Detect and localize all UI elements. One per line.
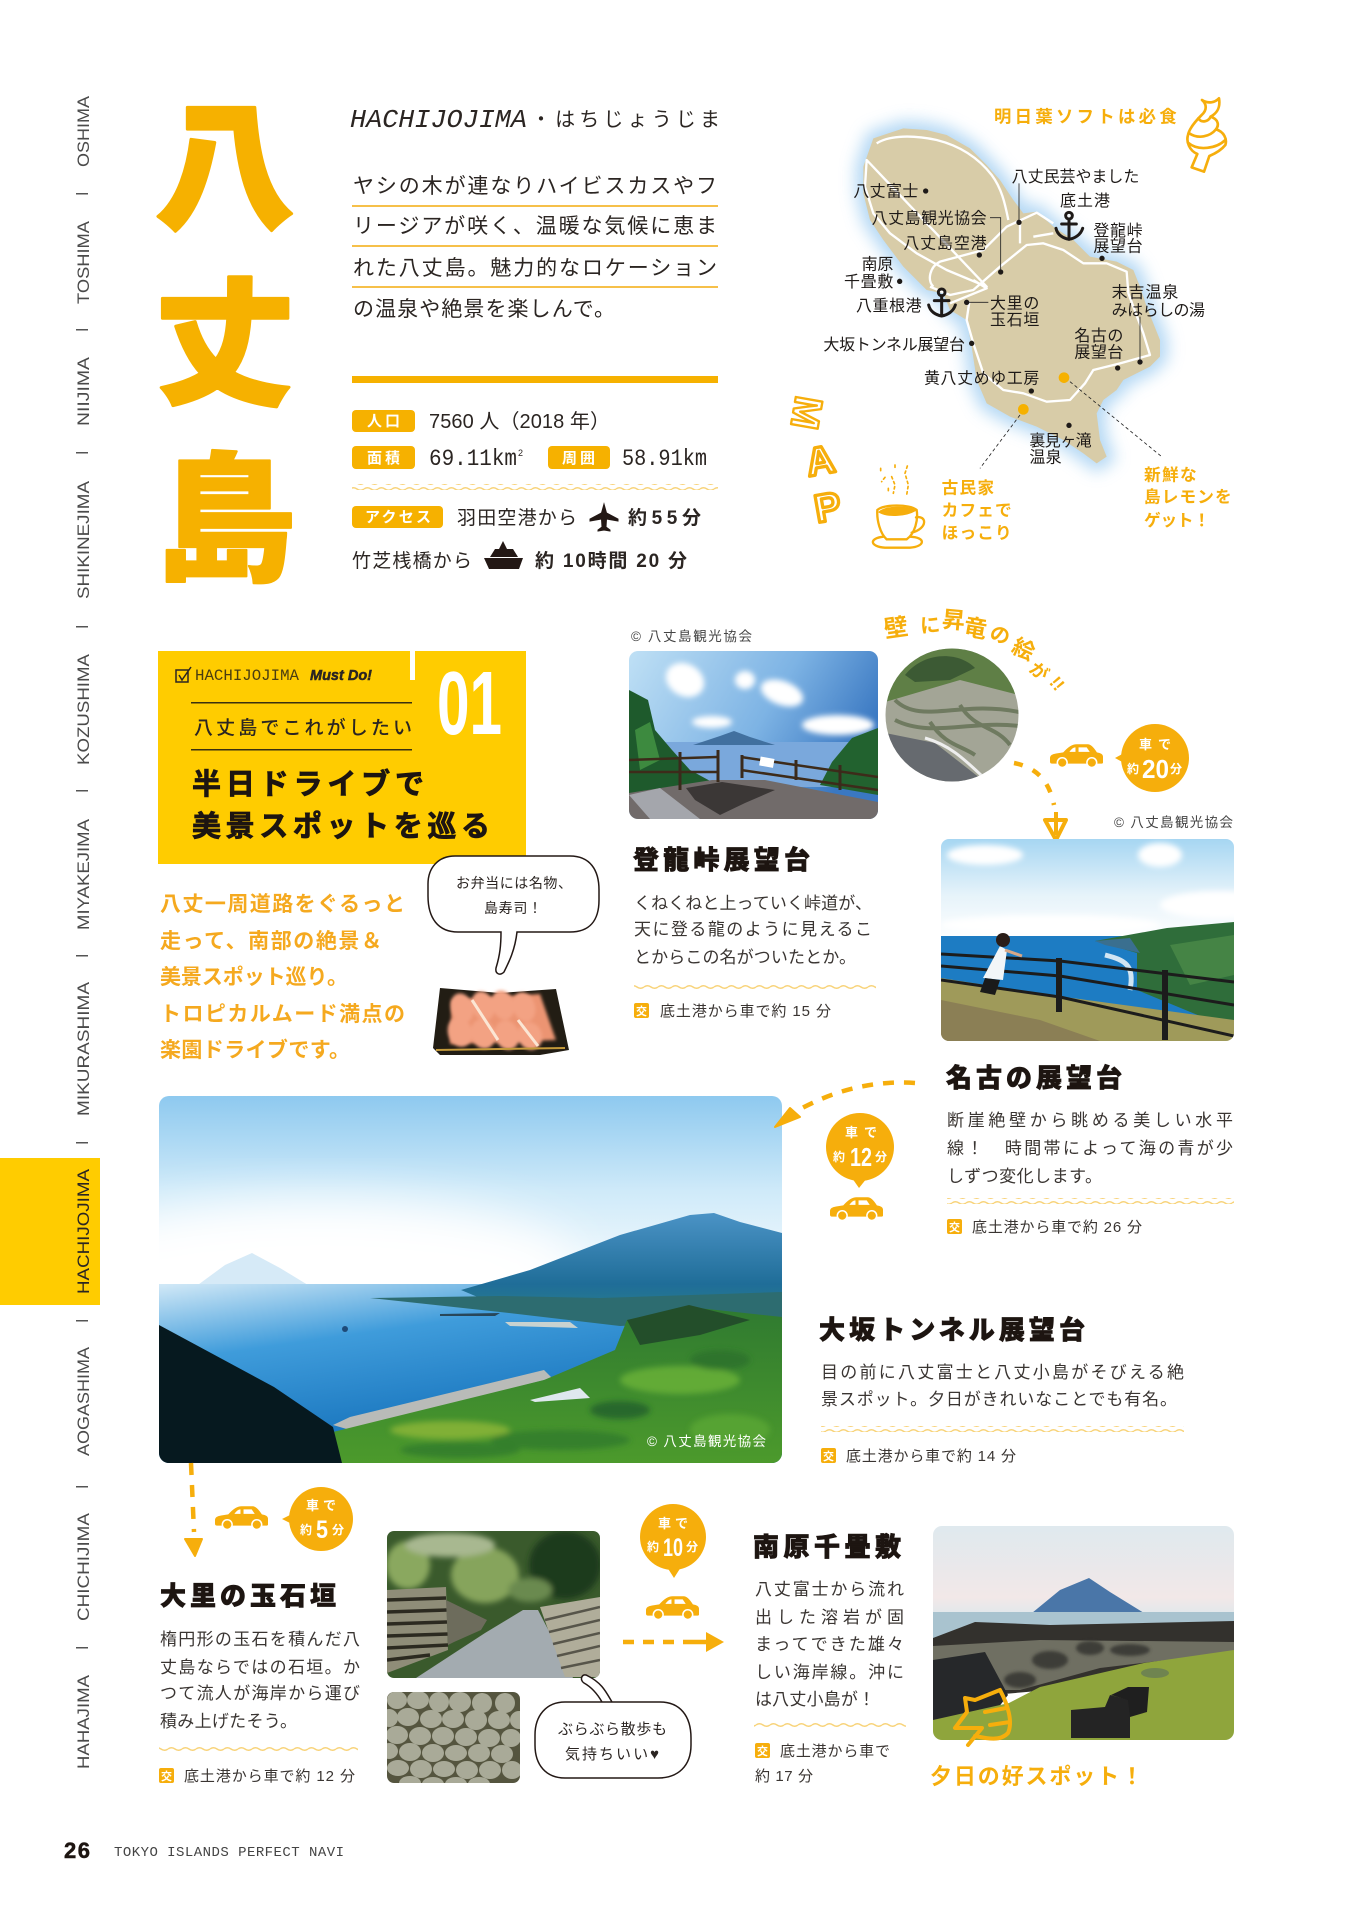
travel badge: 5 min: 5 — [316, 1516, 328, 1544]
access: Nanbara: 交 — [757, 1745, 768, 1758]
spot description: Osato — [160, 1630, 360, 1731]
handwritten note: dragon wall: に — [919, 614, 941, 638]
access: Nanbara: 約 17 分 — [755, 1768, 813, 1785]
map: old house cafe note: ほっこり — [942, 524, 1012, 543]
icon: ship — [484, 541, 523, 569]
access info: 羽田空港から — [457, 507, 577, 529]
spot description: Nanbara: 八丈富士から流れ — [755, 1580, 904, 1599]
map: place labels: 南原 — [862, 255, 893, 273]
map: place labels: 黄八丈めゆ工房 — [924, 370, 1039, 388]
spot description: Tobigazaki: 天に登る龍のように見えるこ — [634, 920, 872, 939]
spot description: Nanbara — [755, 1580, 904, 1709]
travel badge: 5 min: 約 — [300, 1522, 312, 1537]
arrow: dashed down to Osato — [185, 1463, 202, 1556]
access: Nako: 底土港から車で約 26 分 — [972, 1219, 1142, 1236]
photo: dragon wall (circle) — [885, 648, 1019, 782]
map: place labels: 展望台 — [1074, 344, 1123, 362]
map: island lemon note: 新鮮な — [1144, 465, 1197, 484]
travel badge: 5 min — [282, 1487, 353, 1551]
access info: アクセス — [365, 509, 431, 526]
title: 八丈島 — [155, 91, 296, 600]
spot heading: Nanbara: 南原千畳敷 — [753, 1532, 901, 1562]
spot description: Tobigazaki — [634, 894, 872, 967]
spot heading: Osaka tunnel: 大坂トンネル展望台 — [819, 1315, 1085, 1345]
speech bubble: sushi: 島寿司！ — [484, 900, 542, 916]
travel badge: 20 min — [1115, 724, 1189, 792]
map: MAP lettering: M — [782, 393, 831, 433]
stats: population, area, circumference: 人口 — [367, 413, 400, 430]
speech bubble: walking — [535, 1675, 691, 1778]
handwritten note: dragon wall: 壁 — [882, 613, 910, 644]
map: place labels: 底土港 — [1060, 192, 1110, 210]
speech bubble: walking: 気持ちいい♥ — [565, 1746, 659, 1763]
wavy divider — [634, 983, 876, 989]
access: Osato: 交 — [161, 1770, 172, 1783]
travel badge: 20 min: 分 — [1170, 762, 1182, 776]
map: MAP lettering: P — [811, 484, 844, 532]
stats: population, area, circumference: 周囲 — [562, 450, 595, 467]
spot description: Osato: つて流人が海岸から運び — [160, 1684, 360, 1703]
map: place labels: 名古の — [1074, 327, 1123, 345]
map: place labels: 展望台 — [1093, 238, 1143, 256]
title: 八丈島: 丈 — [155, 267, 295, 424]
spot description: Osato: 積み上げたそう。 — [160, 1712, 297, 1731]
icon: coffee cup — [873, 465, 924, 548]
spot description: Osaka tunnel: 景スポット。夕日がきれいなことでも有名。 — [821, 1390, 1177, 1409]
intro text: リージアが咲く、温暖な気候に恵ま — [353, 215, 717, 238]
access: Tobigazaki: 底土港から車で約 15 分 — [660, 1003, 831, 1020]
spot description: Nako: しずつ変化します。 — [947, 1167, 1102, 1186]
access: Osaka tunnel: 交 — [823, 1450, 834, 1463]
travel badge: 10 min: 分 — [686, 1540, 698, 1554]
sidebar: island index: NIIJIMA — [74, 356, 93, 426]
lead text: 八丈一周道路をぐるっと — [160, 893, 405, 916]
wavy divider — [821, 1426, 1184, 1432]
stats: population, area, circumference: 69.11km — [429, 446, 517, 472]
intro text: れた八丈島。魅力的なロケーション — [353, 257, 717, 280]
access info: 約 10時間 20 分 — [535, 550, 687, 572]
sidebar: island index — [0, 95, 100, 1769]
wavy divider — [754, 1722, 906, 1728]
island name reading: ・はちじょうじま — [531, 109, 720, 131]
travel badge: 12 min: 分 — [875, 1150, 887, 1164]
travel badge: 10 min — [640, 1504, 706, 1578]
travel badge: 12 min — [826, 1113, 894, 1188]
access info: 竹芝桟橋から — [352, 550, 472, 572]
map: place labels — [823, 168, 1205, 467]
photo: stone wall road — [386, 1531, 601, 1678]
title: 八丈島: 八 — [155, 91, 295, 248]
handwritten note: dragon wall: 昇 — [941, 606, 966, 634]
spot description: Osaka tunnel: 目の前に八丈富士と八丈小島がそびえる絶 — [821, 1363, 1184, 1382]
icon: car — [215, 1506, 268, 1530]
sidebar: island index: OSHIMA — [74, 95, 93, 167]
lead text: 美景スポット巡り。 — [160, 966, 348, 989]
sidebar: island index: KOZUSHIMA — [74, 653, 93, 765]
spot description: Osato: 丈島ならではの石垣。か — [160, 1658, 360, 1677]
spot description: Tobigazaki: とからこの名がついたとか。 — [634, 948, 856, 967]
sidebar: island index: HACHIJOJIMA — [74, 1168, 93, 1294]
travel badge: 10 min: 約 — [647, 1539, 659, 1554]
icon: car — [830, 1197, 883, 1221]
map of Hachijojima — [782, 98, 1232, 548]
map: roads — [865, 137, 1150, 402]
map: place labels: 八丈民芸やました — [1012, 168, 1139, 186]
map: old house cafe note: カフェで — [942, 501, 1012, 520]
stats: population, area, circumference: 面積 — [367, 449, 400, 467]
photo: Osaka tunnel viewpoint — [159, 1096, 782, 1463]
map: island land — [863, 128, 1160, 463]
footer: book title: TOKYO ISLANDS PERFECT NAVI — [114, 1845, 344, 1861]
intro text — [352, 175, 718, 321]
title: 八丈島: 島 — [156, 443, 296, 600]
intro text: の温泉や絶景を楽しんで。 — [353, 298, 615, 321]
panel: Must Do header — [158, 651, 526, 864]
handwritten note: dragon wall: 竜 — [962, 613, 989, 643]
handwritten note: dragon wall: の — [986, 622, 1013, 650]
map: place labels: 玉石垣 — [990, 311, 1039, 329]
panel: Must Do header: 美景スポットを巡る — [192, 810, 490, 843]
map: place labels: 八丈島観光協会 — [872, 210, 987, 228]
stats: population, area, circumference — [352, 410, 707, 472]
travel badge: 5 min: 車で — [306, 1498, 336, 1513]
map: ashitaba soft cream note: 明日葉ソフトは必食 — [994, 107, 1177, 127]
travel badge: 12 min: 車で — [845, 1125, 877, 1140]
map: place labels: 末吉温泉 — [1112, 284, 1178, 302]
speech bubble: sushi — [428, 856, 599, 974]
map: place labels: 温泉 — [1029, 449, 1062, 467]
access: Osato: 底土港から車で約 12 分 — [184, 1768, 355, 1785]
stats: population, area, circumference: 58.91km — [622, 446, 707, 472]
credit: © 八丈島観光協会 — [1114, 815, 1234, 830]
handwritten note: dragon wall: が — [1025, 657, 1053, 685]
icon: car — [646, 1596, 699, 1620]
icon: pointing hand — [955, 1690, 1010, 1745]
access info — [352, 504, 701, 572]
panel: Must Do header: 半日ドライブで — [192, 767, 424, 801]
map: place labels: 大坂トンネル展望台 — [823, 336, 965, 354]
travel badge: 10 min: 車で — [658, 1516, 688, 1531]
handwritten note: sunset spot: 夕日の好スポット！ — [930, 1764, 1143, 1789]
spot description: Nanbara: は八丈小島が！ — [755, 1690, 875, 1709]
arrow: dashed to Nanbara — [623, 1632, 724, 1652]
travel badge: 20 min: 車で — [1139, 737, 1171, 752]
map: anchor Yaene port — [929, 289, 955, 316]
lead text: トロピカルムード満点の — [160, 1003, 405, 1026]
panel: Must Do header: 01 — [437, 654, 502, 754]
icon: airplane — [590, 504, 618, 531]
spot description: Nanbara: まってできた雄々 — [755, 1635, 904, 1654]
spot description: Osato: 楕円形の玉石を積んだ八 — [160, 1630, 360, 1649]
spot heading: Nako: 名古の展望台 — [946, 1063, 1122, 1093]
map: MAP lettering — [782, 393, 844, 532]
arrow: dashed to Nako viewpoint — [1014, 763, 1066, 840]
sidebar: island index: AOGASHIMA — [74, 1346, 93, 1456]
panel: Must Do header: Must Do! — [310, 667, 372, 684]
access info: 約55分 — [628, 507, 701, 529]
travel badge: 20 min: 約 — [1127, 761, 1139, 776]
photo: Osaka tunnel viewpoint: © 八丈島観光協会 — [647, 1434, 766, 1449]
photo: Tobigazaki viewpoint — [629, 651, 878, 819]
map: island lemon note: ゲット！ — [1144, 511, 1210, 530]
island name reading — [350, 105, 720, 135]
map: place labels: 大里の — [990, 295, 1039, 313]
map: sea glow — [863, 128, 1160, 463]
photo: Nanbara lava coast — [933, 1526, 1234, 1740]
spot description: Nanbara: 出した溶岩が固 — [755, 1608, 904, 1627]
map: place labels: 千畳敷 — [844, 272, 893, 291]
map: island lemon note: 島レモンを — [1144, 488, 1232, 507]
sidebar: island index: SHIKINEJIMA — [74, 480, 93, 599]
map: place labels: 登龍峠 — [1093, 222, 1143, 240]
spot description: Tobigazaki: くねくねと上っていく峠道が、 — [634, 894, 872, 913]
sidebar: island index: MIKURASHIMA — [74, 981, 93, 1116]
icon: checkbox — [176, 667, 191, 682]
travel badge: 5 min: 分 — [332, 1523, 344, 1537]
spot heading: Osato: 大里の玉石垣 — [160, 1581, 336, 1611]
thick divider — [352, 376, 718, 383]
map: place labels: 八丈富士 — [853, 183, 918, 201]
map: point markers — [897, 188, 1143, 428]
icon: soft serve — [1187, 98, 1226, 172]
speech bubble: sushi: お弁当には名物、 — [456, 875, 572, 891]
travel badge: 12 min: 約 — [833, 1149, 845, 1164]
lead text — [160, 893, 405, 1062]
arrow: dashed to Osaka tunnel — [775, 1083, 915, 1127]
spot heading: Tobigazaki: 登龍峠展望台 — [633, 845, 810, 875]
panel: Must Do header: HACHIJOJIMA — [195, 667, 299, 685]
sidebar: island index: TOSHIMA — [74, 220, 93, 304]
map: place labels: 裏見ヶ滝 — [1029, 432, 1092, 450]
spot description: Osaka tunnel — [821, 1363, 1184, 1409]
photo: rounded stones — [387, 1692, 520, 1783]
travel badge: 12 min: 12 — [850, 1142, 872, 1172]
map: MAP lettering: A — [803, 437, 838, 485]
access: Tobigazaki: 交 — [636, 1005, 647, 1018]
island name reading: HACHIJOJIMA — [350, 105, 527, 135]
speech bubble: walking: ぶらぶら散歩も — [558, 1721, 667, 1738]
spot description: Nako: 断崖絶壁から眺める美しい水平 — [947, 1111, 1233, 1130]
sidebar: island index: HAHAJIMA — [74, 1674, 93, 1769]
sidebar: island index: CHICHIJIMA — [74, 1512, 93, 1621]
wavy divider — [159, 1747, 358, 1753]
stats: population, area, circumference: 7560 人（2018 年） — [429, 410, 610, 433]
access: Osaka tunnel: 底土港から車で約 14 分 — [846, 1448, 1016, 1465]
icon: car — [1050, 744, 1103, 768]
sidebar: island index: MIYAKEJIMA — [74, 818, 93, 930]
travel badge: 20 min: 20 — [1142, 754, 1169, 784]
map: anchor Sokodo port — [1056, 212, 1083, 239]
credit: © 八丈島観光協会 — [631, 629, 752, 644]
spot description: Nako: 線！ 時間帯によって海の青が少 — [947, 1139, 1233, 1158]
panel: Must Do header: 八丈島でこれがしたい — [194, 717, 412, 739]
access: Nako: 交 — [949, 1221, 960, 1234]
map: old house cafe note: 古民家 — [942, 477, 994, 497]
access: Nanbara — [755, 1743, 890, 1785]
photo: Nako viewpoint — [941, 839, 1234, 1041]
map: place labels: 八丈島空港 — [903, 235, 987, 253]
spot description: Nako — [947, 1111, 1233, 1186]
footer: page number: 26 — [64, 1838, 90, 1863]
spot description: Nanbara: しい海岸線。沖に — [755, 1663, 904, 1682]
handwritten note: dragon wall: !! — [1045, 673, 1068, 695]
photo: sushi — [433, 987, 569, 1055]
map: island lemon note — [1144, 465, 1232, 530]
handwritten note: dragon wall: 絵 — [1008, 633, 1039, 665]
map: old house cafe note — [942, 477, 1012, 543]
wavy divider — [352, 484, 718, 490]
map: leader lines — [967, 183, 1162, 468]
access: Nanbara: 底土港から車で — [780, 1743, 890, 1760]
intro text: ヤシの木が連なりハイビスカスやフ — [353, 175, 717, 198]
wavy divider — [947, 1198, 1234, 1204]
travel badge: 10 min: 10 — [663, 1534, 683, 1562]
handwritten note: dragon wall — [882, 606, 1068, 695]
lead text: 走って、南部の絶景＆ — [160, 930, 382, 953]
map: place labels: 八重根港 — [856, 297, 922, 315]
map: place labels: みはらしの湯 — [1112, 301, 1205, 319]
lead text: 楽園ドライブです。 — [160, 1038, 350, 1062]
stats: population, area, circumference: 2 — [518, 448, 523, 458]
